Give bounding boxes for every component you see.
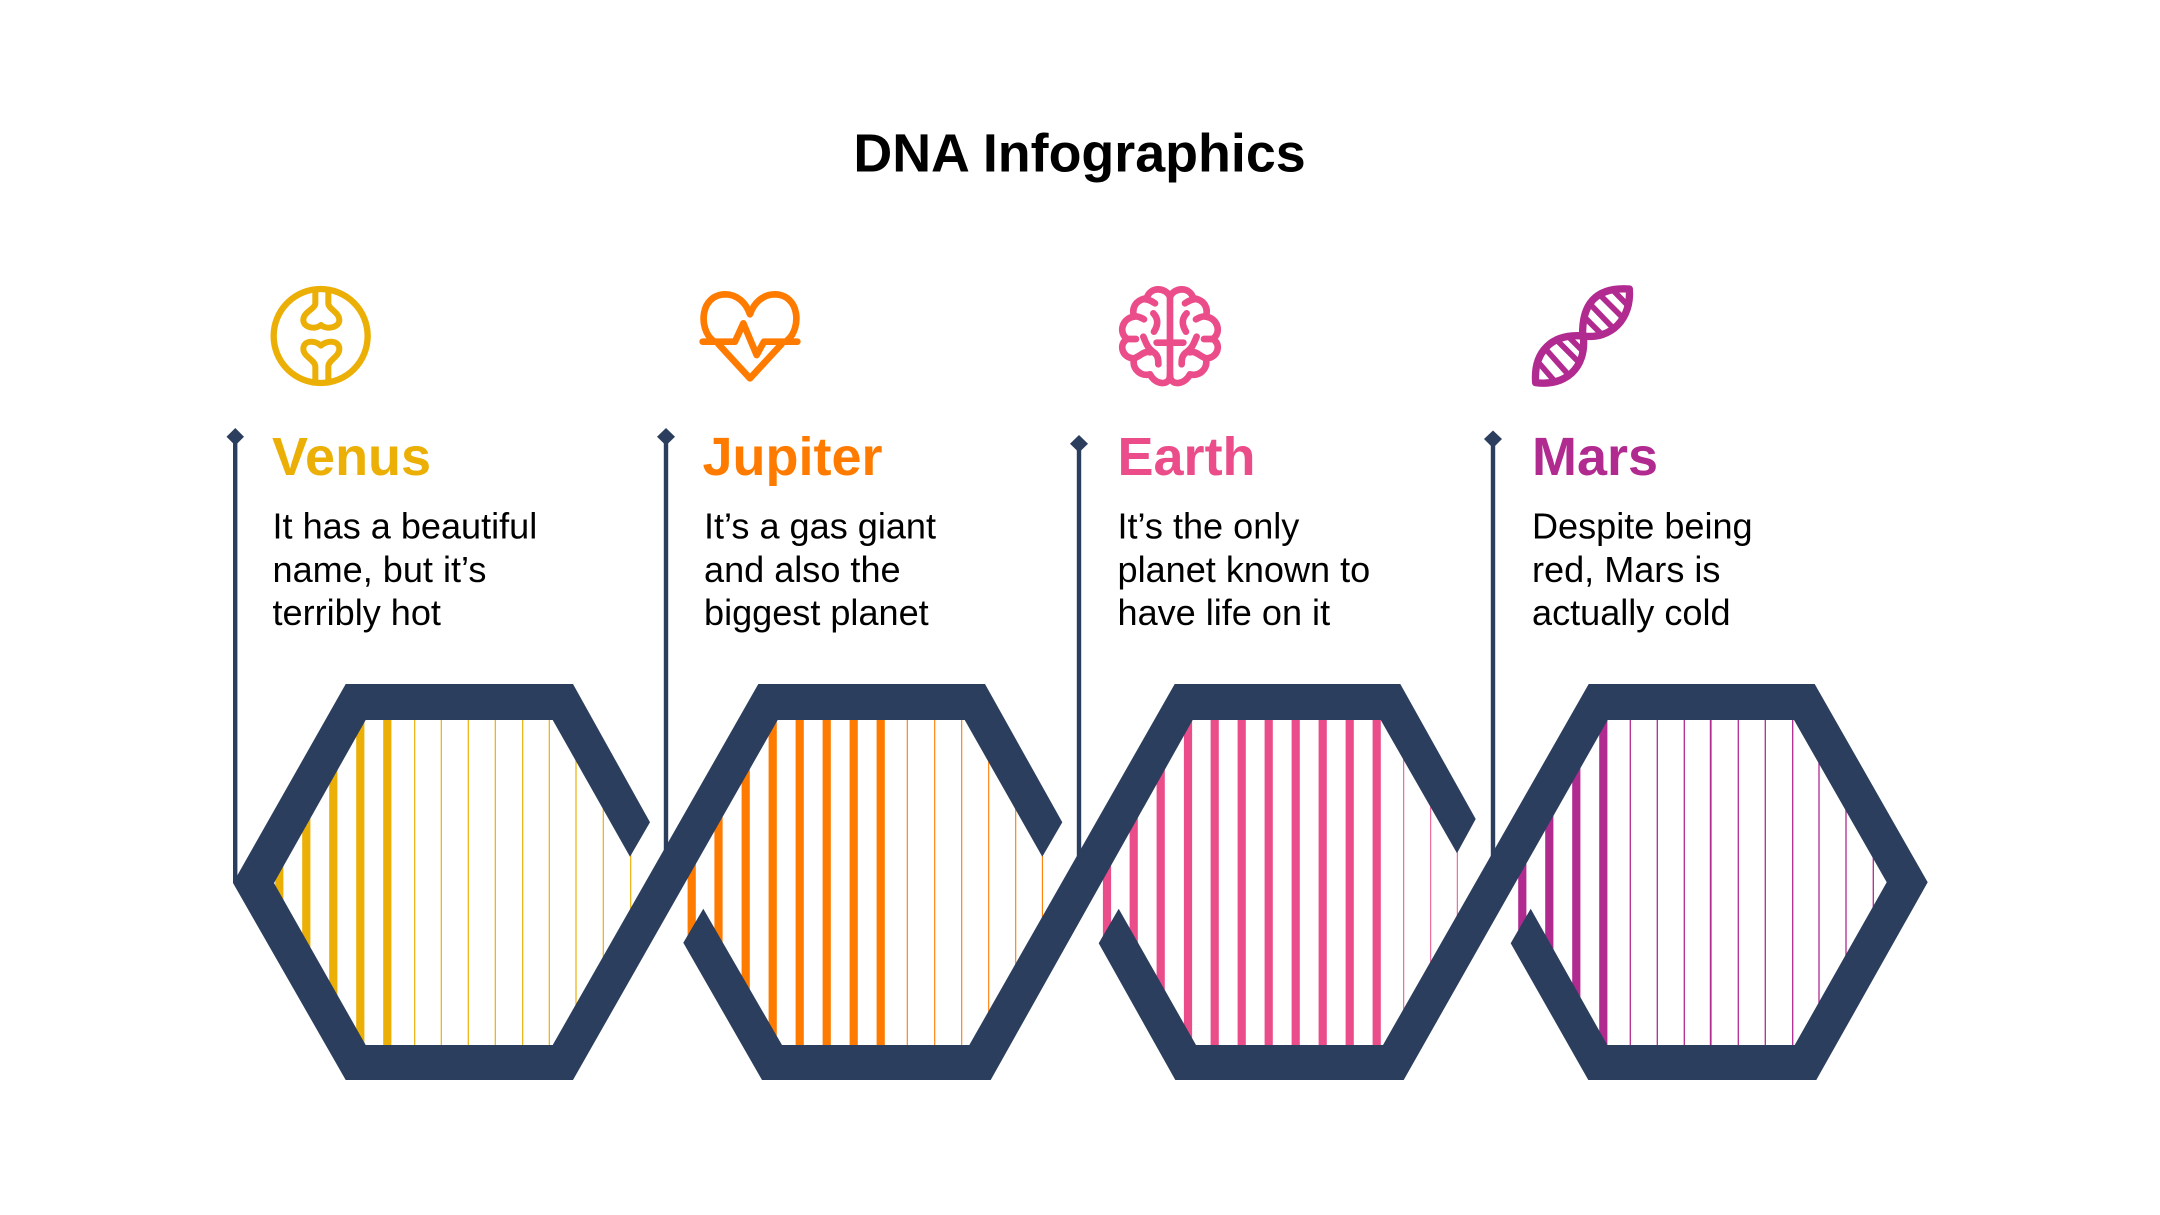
stripes: Mars	[1518, 720, 1874, 1045]
text block: Venus	[272, 427, 537, 633]
icon: brain	[1122, 289, 1218, 383]
description: Earth: It’s the only	[1118, 506, 1299, 546]
description: Mars: Despite being	[1532, 506, 1753, 546]
description: Venus: name, but it’s	[272, 549, 486, 590]
description: Mars: actually cold	[1532, 592, 1731, 633]
connector line: Jupiter	[657, 428, 675, 862]
text block: Jupiter	[702, 427, 936, 633]
stripes: Earth	[1102, 720, 1458, 1045]
DNA strand: Jupiter bottom into Earth top	[683, 684, 1476, 1080]
title: DNA Infographics	[853, 124, 1306, 184]
heading: Earth: Earth	[1118, 427, 1256, 487]
description: Earth: have life on it	[1118, 592, 1330, 633]
description: Mars: red, Mars is	[1532, 549, 1720, 590]
heading: Venus: Venus	[272, 427, 431, 487]
icon: bone joint	[274, 289, 368, 383]
connector line: Venus	[226, 428, 244, 883]
heading: Jupiter: Jupiter	[702, 427, 883, 487]
stripes: Jupiter	[688, 720, 1043, 1045]
description: Jupiter: It’s a gas giant	[704, 506, 936, 546]
text block: Mars	[1532, 427, 1753, 633]
description: Jupiter: biggest planet	[704, 592, 929, 633]
description: Venus: terribly hot	[272, 592, 441, 633]
description: Venus: It has a beautiful	[272, 506, 537, 546]
stripes: Venus	[275, 720, 632, 1045]
icon: heart with pulse	[703, 294, 797, 378]
description: Jupiter: and also the	[704, 549, 901, 590]
heading: Mars: Mars	[1532, 427, 1658, 487]
text block: Earth	[1118, 427, 1370, 633]
DNA strand: Earth bottom into Mars hexagon	[1099, 684, 1928, 1080]
description: Earth: planet known to	[1118, 549, 1370, 590]
icon: DNA helix	[1535, 289, 1630, 383]
connector line: Earth	[1070, 435, 1088, 865]
connector line: Mars	[1484, 430, 1502, 865]
DNA strand: Venus hexagon into Jupiter top	[233, 684, 1062, 1080]
